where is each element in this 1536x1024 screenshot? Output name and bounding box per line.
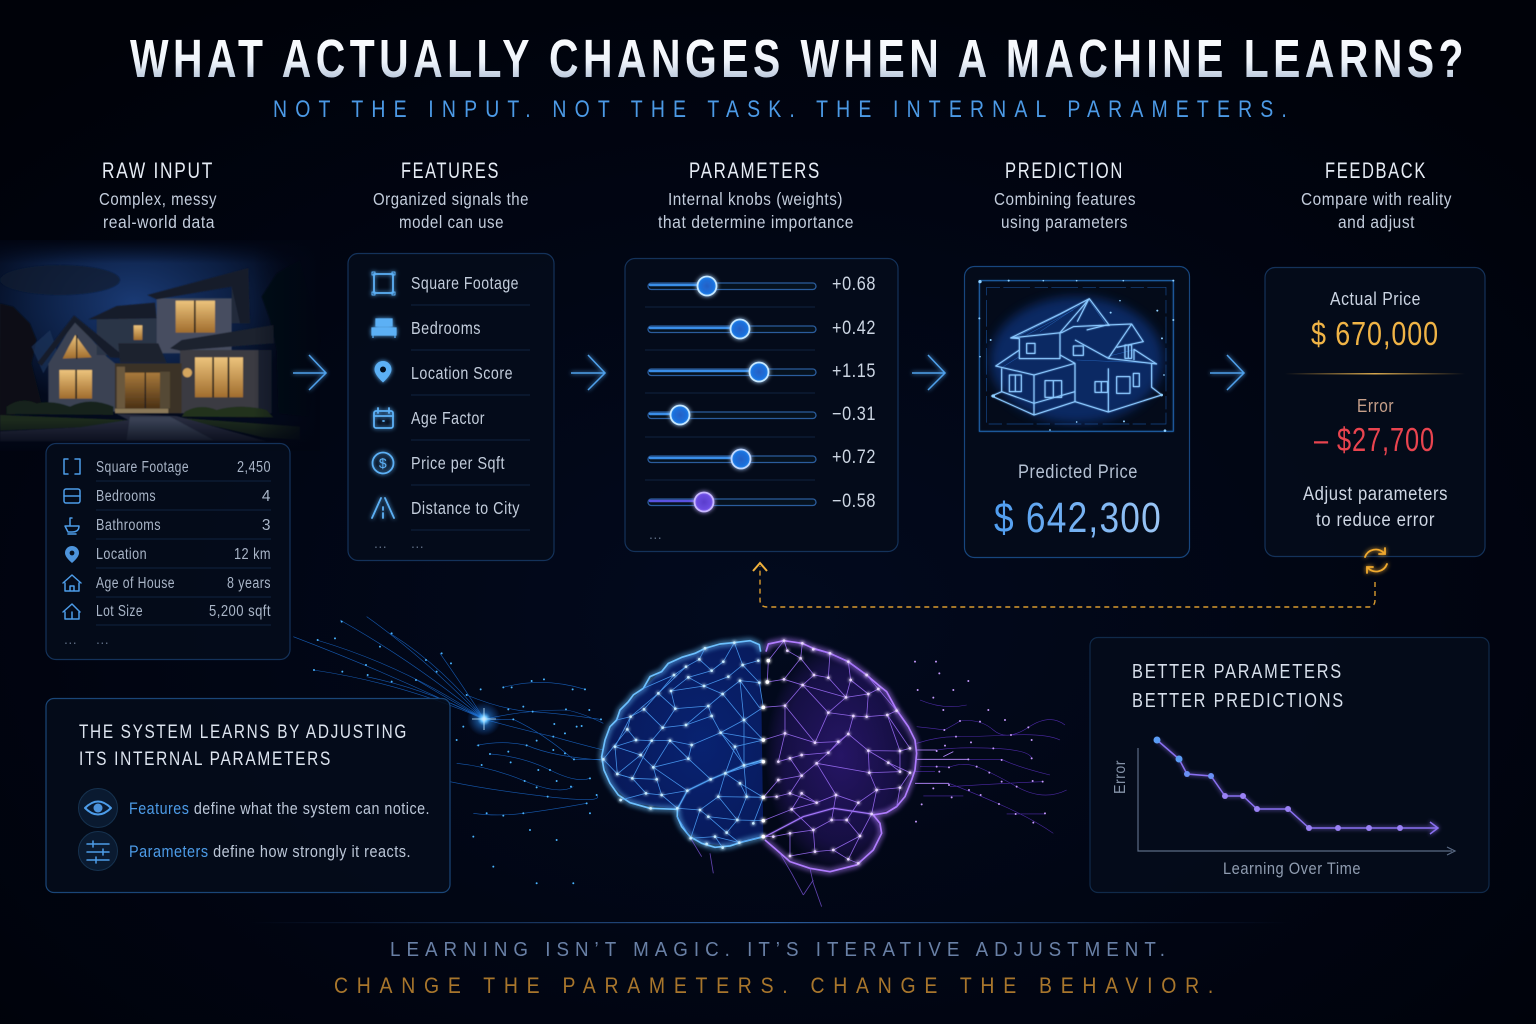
table rows: 12 km: [234, 546, 271, 563]
icon: location score: [374, 361, 392, 382]
actual price: [1311, 289, 1439, 352]
column heading: features: [373, 158, 529, 232]
icon: age factor: [374, 408, 393, 428]
slider 3: [648, 361, 876, 382]
feature names: Square Footage: [411, 273, 519, 293]
table rows: Bedrooms: [96, 488, 156, 505]
arrow: features to parameters: [571, 355, 605, 390]
adjust text: [1303, 484, 1448, 531]
column heading: raw input: Complex, messy: [99, 189, 217, 209]
slider 4: −0.31: [832, 404, 876, 425]
actual price: $ 670,000: [1311, 315, 1439, 352]
brain stem: [691, 838, 822, 907]
icon: eye: [78, 788, 118, 828]
table rows: Location: [96, 546, 147, 563]
network: purple particles: [915, 662, 1067, 833]
right hemisphere outline: [765, 641, 917, 872]
panel: error chart: [1090, 638, 1489, 892]
panel: system learns: [46, 698, 450, 892]
icon: wireframe house: [978, 280, 1174, 432]
icon: sliders: [78, 832, 118, 870]
arrow: raw input to features: [293, 355, 326, 390]
chart heading: [1132, 661, 1345, 712]
table rows: 2,450: [237, 459, 271, 476]
column heading: raw input: RAW INPUT: [102, 158, 214, 183]
panel: feedback: [1265, 268, 1485, 556]
center line: [762, 653, 765, 837]
column heading: parameters: that determine importance: [658, 212, 854, 232]
icon: bath: [65, 518, 79, 534]
feature names: Price per Sqft: [411, 453, 505, 473]
illustration: glowing brain network: [602, 641, 917, 907]
slider 5: +0.72: [832, 447, 876, 468]
predicted price label: Predicted Price: [1018, 462, 1138, 483]
feature names: ...: [411, 535, 424, 551]
column heading: feedback: FEEDBACK: [1325, 158, 1427, 183]
icon: feedback cycle: [1365, 548, 1387, 573]
slider 3: +1.15: [832, 361, 876, 382]
parameters statement: Parameters define how strongly it reacts.: [129, 842, 411, 861]
heading: ITS INTERNAL PARAMETERS: [79, 749, 332, 770]
right nodes: [773, 641, 910, 863]
table rows: ...: [96, 631, 109, 647]
feature names: [374, 273, 520, 551]
icon: lot size: [63, 604, 80, 619]
icon: bedrooms: [372, 319, 396, 338]
panel: features: [348, 254, 554, 560]
left mesh: [603, 643, 763, 848]
heading: [79, 722, 408, 770]
left nodes: [603, 643, 768, 848]
glowing source point: [467, 702, 501, 736]
network: particles flowing into brain: [293, 617, 603, 883]
arrow: prediction to feedback: [1210, 355, 1244, 390]
table rows: Lot Size: [96, 603, 143, 620]
table rows: 4: [262, 488, 271, 505]
predicted price value: $ 642,300: [994, 494, 1162, 542]
right mesh: [763, 641, 910, 863]
feature names: Location Score: [411, 363, 513, 383]
subtitle: NOT THE INPUT. NOT THE TASK. THE INTERNAL PARAMETERS.: [273, 96, 1295, 123]
column heading: raw input: [99, 158, 217, 232]
chart heading: BETTER PREDICTIONS: [1132, 690, 1345, 712]
features statement: Features define what the system can notice.: [129, 799, 430, 818]
column heading: prediction: Combining features: [994, 189, 1136, 209]
slider 2: [648, 318, 876, 339]
panel: parameters: [625, 258, 898, 552]
feature names: Bedrooms: [411, 318, 481, 338]
arrow: parameters to prediction: [912, 355, 945, 390]
table rows: [64, 459, 271, 647]
table rows: Age of House: [96, 575, 175, 592]
error: Error: [1357, 396, 1394, 416]
slider 1: [648, 274, 876, 296]
panel: prediction: [964, 266, 1190, 558]
feature names: ...: [374, 535, 387, 551]
table rows: 5,200 sqft: [209, 603, 271, 620]
icon: age of house: [63, 575, 81, 591]
error: – $27,700: [1314, 421, 1435, 458]
icon: price per sqft: [372, 452, 394, 474]
column heading: raw input: real-world data: [103, 212, 215, 232]
table rows: ...: [64, 631, 77, 647]
icon: square footage: [64, 459, 80, 474]
more indicator: ...: [649, 526, 662, 542]
column heading: feedback: and adjust: [1338, 212, 1415, 232]
column heading: feedback: [1301, 158, 1452, 232]
icon: bed: [64, 489, 80, 503]
column heading: features: model can use: [399, 212, 504, 232]
icon: square footage: [372, 272, 395, 295]
icon: price per sqft: $: [379, 455, 387, 471]
illustration: house at night: [0, 240, 320, 451]
slider 5: [648, 447, 876, 468]
column heading: parameters: [658, 158, 854, 232]
slider 6: −0.58: [832, 491, 876, 512]
feature names: Age Factor: [411, 408, 485, 428]
icon: distance to city: [372, 498, 394, 518]
x axis label: Learning Over Time: [1223, 859, 1361, 878]
closing line one: LEARNING ISN’T MAGIC. IT’S ITERATIVE ADJUSTMENT.: [390, 939, 1171, 961]
lobe boundaries: [677, 760, 763, 809]
adjust text: to reduce error: [1316, 510, 1435, 531]
feature names: Distance to City: [411, 498, 520, 518]
table rows: Bathrooms: [96, 517, 161, 534]
column heading: features: FEATURES: [401, 158, 500, 183]
heading: THE SYSTEM LEARNS BY ADJUSTING: [79, 722, 408, 743]
error: [1314, 396, 1435, 458]
y axis label: Error: [1112, 760, 1129, 794]
slider 1: +0.68: [832, 274, 876, 295]
table rows: 3: [262, 517, 271, 534]
adjust text: Adjust parameters: [1303, 484, 1448, 505]
column heading: prediction: PREDICTION: [1005, 158, 1124, 183]
table rows: Square Footage: [96, 459, 189, 476]
column heading: parameters: Internal knobs (weights): [668, 189, 843, 209]
left hemisphere outline: [602, 641, 763, 847]
slider 6: [648, 491, 876, 512]
column heading: prediction: using parameters: [1001, 212, 1128, 232]
line chart: [1138, 736, 1455, 855]
chart heading: BETTER PARAMETERS: [1132, 661, 1343, 683]
column heading: parameters: PARAMETERS: [689, 158, 821, 183]
column heading: feedback: Compare with reality: [1301, 189, 1452, 209]
arrow: feedback loop to parameters: [753, 563, 1375, 607]
slider 4: [648, 404, 876, 425]
closing line two: CHANGE THE PARAMETERS. CHANGE THE BEHAVIOR.: [334, 973, 1222, 998]
panel: raw input table: [46, 444, 290, 660]
table rows: 8 years: [227, 575, 271, 592]
actual price: Actual Price: [1330, 289, 1421, 309]
icon: location: [65, 546, 79, 563]
slider 2: +0.42: [832, 318, 876, 339]
column heading: prediction: [994, 158, 1136, 232]
column heading: features: Organized signals the: [373, 189, 529, 209]
